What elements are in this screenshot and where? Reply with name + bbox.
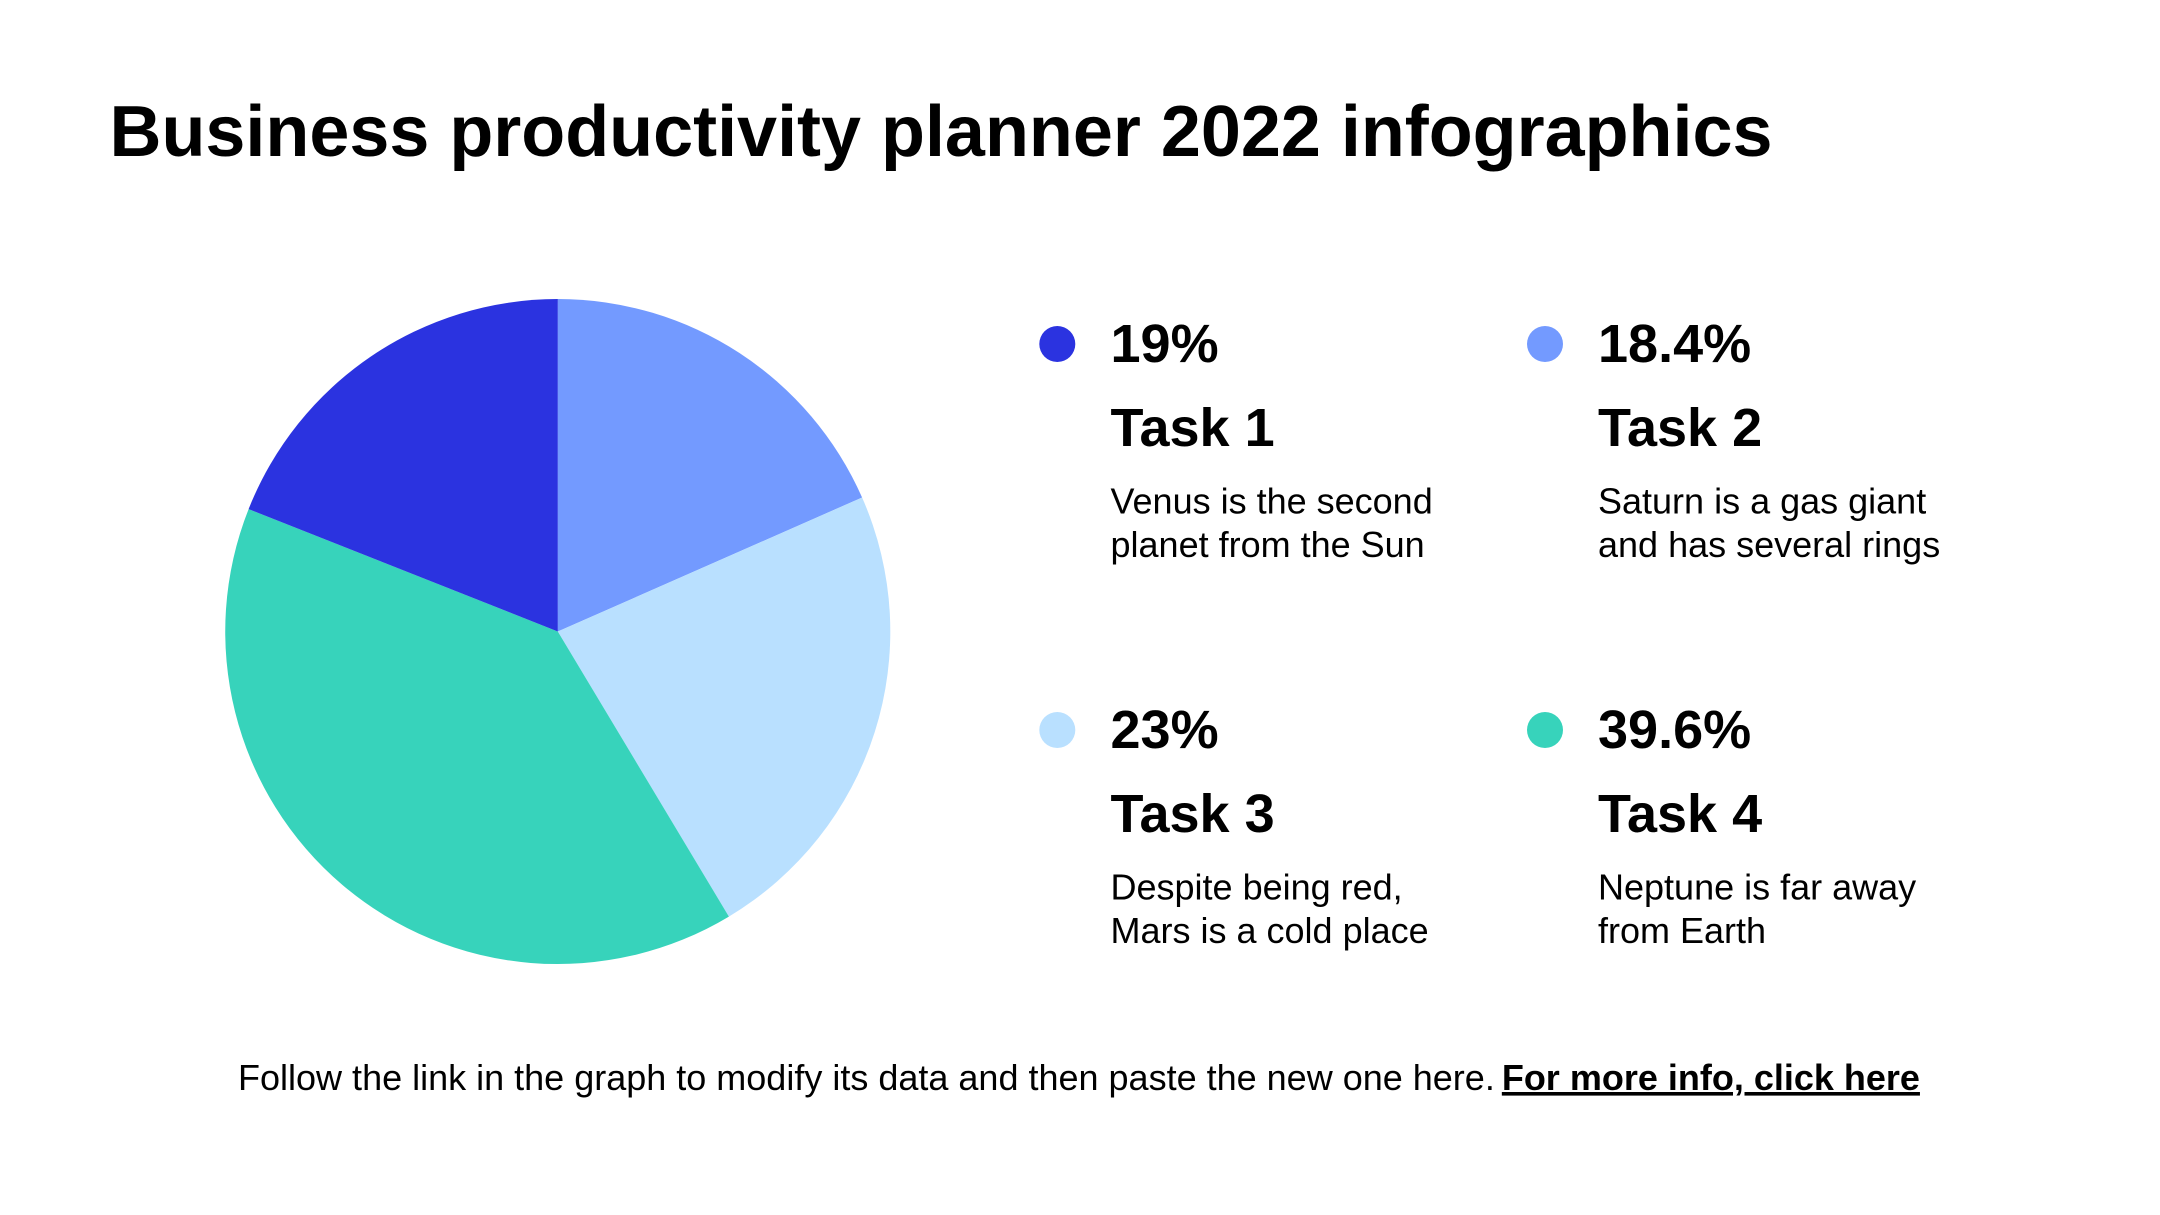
- value: task 4: 39.6%: [1598, 700, 1751, 760]
- slice: task 4, 39.6%: [225, 509, 729, 964]
- footer note: Follow the link in the graph to modify its data and then paste the new one here. For more info, click here: [238, 1057, 1920, 1098]
- description: task 1: planet from the Sun: [1110, 524, 1425, 565]
- title: Business productivity planner 2022 infographics: [110, 92, 1772, 172]
- description: task 2: and has several rings: [1598, 524, 1940, 565]
- legend item: task 1: [1039, 314, 1433, 565]
- value: task 3: 23%: [1110, 700, 1219, 760]
- value: task 1: 19%: [1110, 314, 1219, 374]
- pie chart: [225, 299, 890, 964]
- heading: task 3: Task 3: [1110, 784, 1275, 844]
- slice: task 3, 23%: [558, 498, 890, 917]
- heading: task 4: Task 4: [1598, 784, 1762, 844]
- legend dot: task 2: [1527, 326, 1563, 362]
- legend dot: task 4: [1527, 712, 1563, 748]
- description: task 4: from Earth: [1598, 910, 1766, 951]
- legend dot: task 3: [1039, 712, 1075, 748]
- slice: task 2, 18.4%: [558, 299, 862, 632]
- heading: task 2: Task 2: [1598, 398, 1762, 458]
- value: task 2: 18.4%: [1598, 314, 1751, 374]
- legend item: task 3: [1039, 700, 1429, 951]
- legend dot: task 1: [1039, 326, 1075, 362]
- description: task 4: Neptune is far away: [1598, 866, 1916, 908]
- legend item: task 4: [1527, 700, 1916, 951]
- legend item: task 2: [1527, 314, 1940, 565]
- heading: task 1: Task 1: [1110, 398, 1275, 458]
- description: task 3: Mars is a cold place: [1110, 910, 1429, 951]
- description: task 1: Venus is the second: [1110, 480, 1433, 522]
- description: task 2: Saturn is a gas giant: [1598, 480, 1926, 522]
- description: task 3: Despite being red,: [1110, 866, 1403, 908]
- slice: task 1, 19%: [249, 299, 558, 632]
